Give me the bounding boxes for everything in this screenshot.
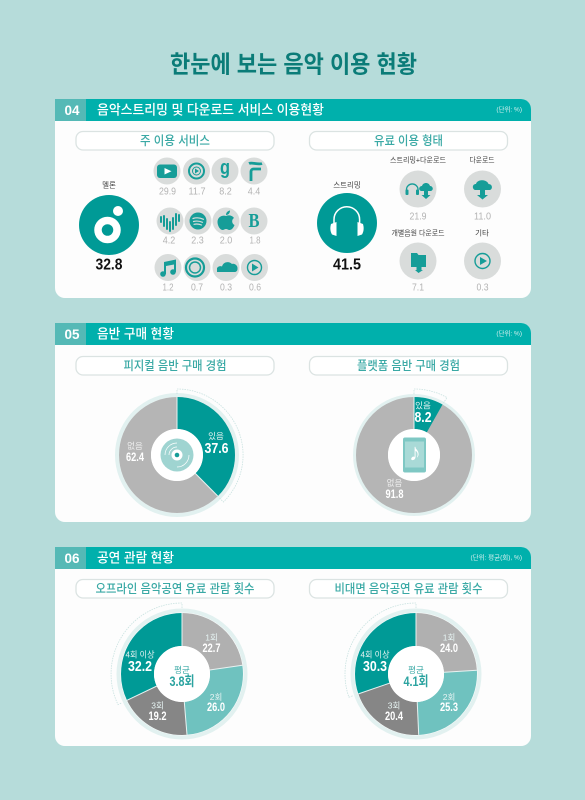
donut chart: platform album: 없음 [387,478,402,488]
icon: smartphone with note: ♪ [409,440,421,466]
pie chart: online concert: 평균 [408,665,424,675]
item: individual track download 7.1: 7.1 [412,282,424,294]
icon: Spotify 2.3 [184,208,212,246]
panel: 04 streaming and download services [55,99,531,298]
highlight: Melon 32.8: 멜론 [102,180,116,190]
icon: Genie 8.2: g [220,157,230,179]
icon: YouTube 29.9: 29.9 [159,186,176,198]
subheading: offline concert: 오프라인 음악공연 유료 관람 횟수 [96,582,254,596]
pie chart: online concert: 25.3 [440,702,458,714]
pie chart: online concert: 1회 [443,632,455,642]
donut chart: platform album: 91.8 [386,489,404,501]
donut chart: platform album: 8.2 [414,410,432,426]
highlight: streaming 41.5 [317,180,377,274]
header: section 04: (단위: %) [496,104,522,114]
item: download 11.0: 11.0 [474,212,491,222]
donut chart: physical album: 37.6 [204,441,228,457]
pie chart: online concert [345,603,480,738]
item: download 11.0 [464,156,501,222]
icon: Apple Music 2.0: 2.0 [220,236,233,246]
header: section 05: (단위: %) [496,328,522,338]
header: section 05: 05 [64,326,80,342]
icon: Apple Music 2.0 [212,208,240,246]
item: individual track download 7.1: 개별음원 다운로드 [392,228,445,238]
panel: 05 album purchases [55,323,531,522]
icon: music note 1.2 [154,254,182,294]
pie chart: online concert: 24.0 [440,643,458,655]
subheading: paid usage type [310,132,508,150]
icon: YouTube Music 11.7: 11.7 [188,186,206,198]
header: section 05: 음반 구매 현황 [97,326,174,342]
subheading: physical album purchase [76,356,274,375]
pie chart: offline concert: 1회 [205,632,218,642]
highlight: streaming 41.5: 41.5 [333,256,361,274]
subheading: paid usage type: 유료 이용 형태 [374,133,443,148]
subheading: main services: 주 이용 서비스 [140,134,210,148]
pie chart: offline concert: 3.8회 [170,674,194,689]
subheading: platform album purchase: 플랫폼 음반 구매 경험 [357,358,460,373]
icon: music note 1.2: 1.2 [162,282,174,294]
item: streaming + download 21.9 [390,154,446,222]
icon: SoundCloud 0.3 [212,254,240,294]
icon: Vibe 4.2: 4.2 [163,236,176,246]
subheading: offline concert [76,580,274,598]
subheading: online concert [310,580,508,598]
item: streaming + download 21.9: 스트리밍+다운로드 [390,154,446,164]
donut chart: physical album: 있음 [208,431,224,441]
pie chart: offline concert: 19.2 [148,711,166,723]
highlight: Melon 32.8: 32.8 [96,256,123,274]
donut chart: physical album: 62.4 [126,452,144,464]
pie chart: online concert: 30.3 [363,659,387,675]
pie chart: online concert: 4.1회 [404,674,428,689]
icon: SoundCloud 0.3: 0.3 [220,282,232,294]
highlight: Melon 32.8 [79,180,139,274]
item: other 0.3: 기타 [475,228,489,238]
icon: Bugs 1.8: B [248,210,260,232]
icon: play 0.6: 0.6 [249,282,261,294]
header: section 06 [55,547,531,569]
highlight: streaming 41.5: 스트리밍 [333,180,361,190]
icon: Bugs 1.8: 1.8 [250,236,261,246]
pie chart: offline concert: 32.2 [128,659,152,675]
pie chart: offline concert: 26.0 [207,702,225,714]
donut chart: platform album [355,389,473,514]
icon: FLO 4.4: 4.4 [248,186,261,198]
item: other 0.3 [464,228,501,294]
pie chart: online concert: 2회 [443,692,455,702]
header: section 04: 음악스트리밍 및 다운로드 서비스 이용현황 [97,102,324,118]
header: section 04: 04 [64,102,80,118]
icon: FLO 4.4 [240,158,268,198]
subheading: online concert: 비대면 음악공연 유료 관람 횟수 [334,582,482,596]
header: section 04 [55,99,531,121]
header: section 06: 06 [64,550,80,566]
icon: vinyl disc [160,438,194,472]
subheading: physical album purchase: 피지컬 음반 구매 경험 [124,358,226,373]
icon: Spotify 2.3: 2.3 [191,236,204,246]
item: other 0.3: 0.3 [476,282,489,294]
item: download 11.0: 다운로드 [470,156,495,164]
item: individual track download 7.1 [392,228,445,294]
icon: Vibe 4.2 [156,208,184,246]
header: section 06: (단위: 평균(회), %) [470,552,522,562]
donut chart: physical album [117,389,243,515]
icon: play 0.6 [241,254,268,294]
pie chart: online concert: 3회 [388,700,400,710]
icon: Genie 8.2 [212,157,238,198]
panel: 06 concert attendance [55,547,531,746]
subheading: platform album purchase [310,356,508,375]
icon: ring 0.7: 0.7 [191,282,203,294]
title: 한눈에 보는 음악 이용 현황 [170,52,417,78]
item: streaming + download 21.9: 21.9 [410,212,427,222]
subheading: main services [76,132,274,150]
pie chart: online concert: 20.4 [385,711,403,723]
icon: YouTube 29.9 [154,158,180,198]
pie chart: online concert: 4회 이상 [360,650,390,660]
pie chart: offline concert: 3회 [151,700,164,710]
pie chart: offline concert: 22.7 [202,643,220,655]
icon: ring 0.7 [184,254,210,294]
icon: Genie 8.2: 8.2 [219,186,232,198]
pie chart: offline concert [111,603,246,738]
header: section 05 [55,323,531,345]
pie chart: offline concert: 2회 [210,692,222,702]
header: section 06: 공연 관람 현황 [97,550,174,566]
donut chart: physical album: 없음 [127,441,143,451]
pie chart: offline concert: 평균 [174,665,190,675]
icon: Bugs 1.8 [240,208,268,246]
icon: YouTube Music 11.7 [183,158,210,198]
donut chart: platform album: 있음 [415,400,431,410]
pie chart: offline concert: 4회 이상 [126,650,155,660]
